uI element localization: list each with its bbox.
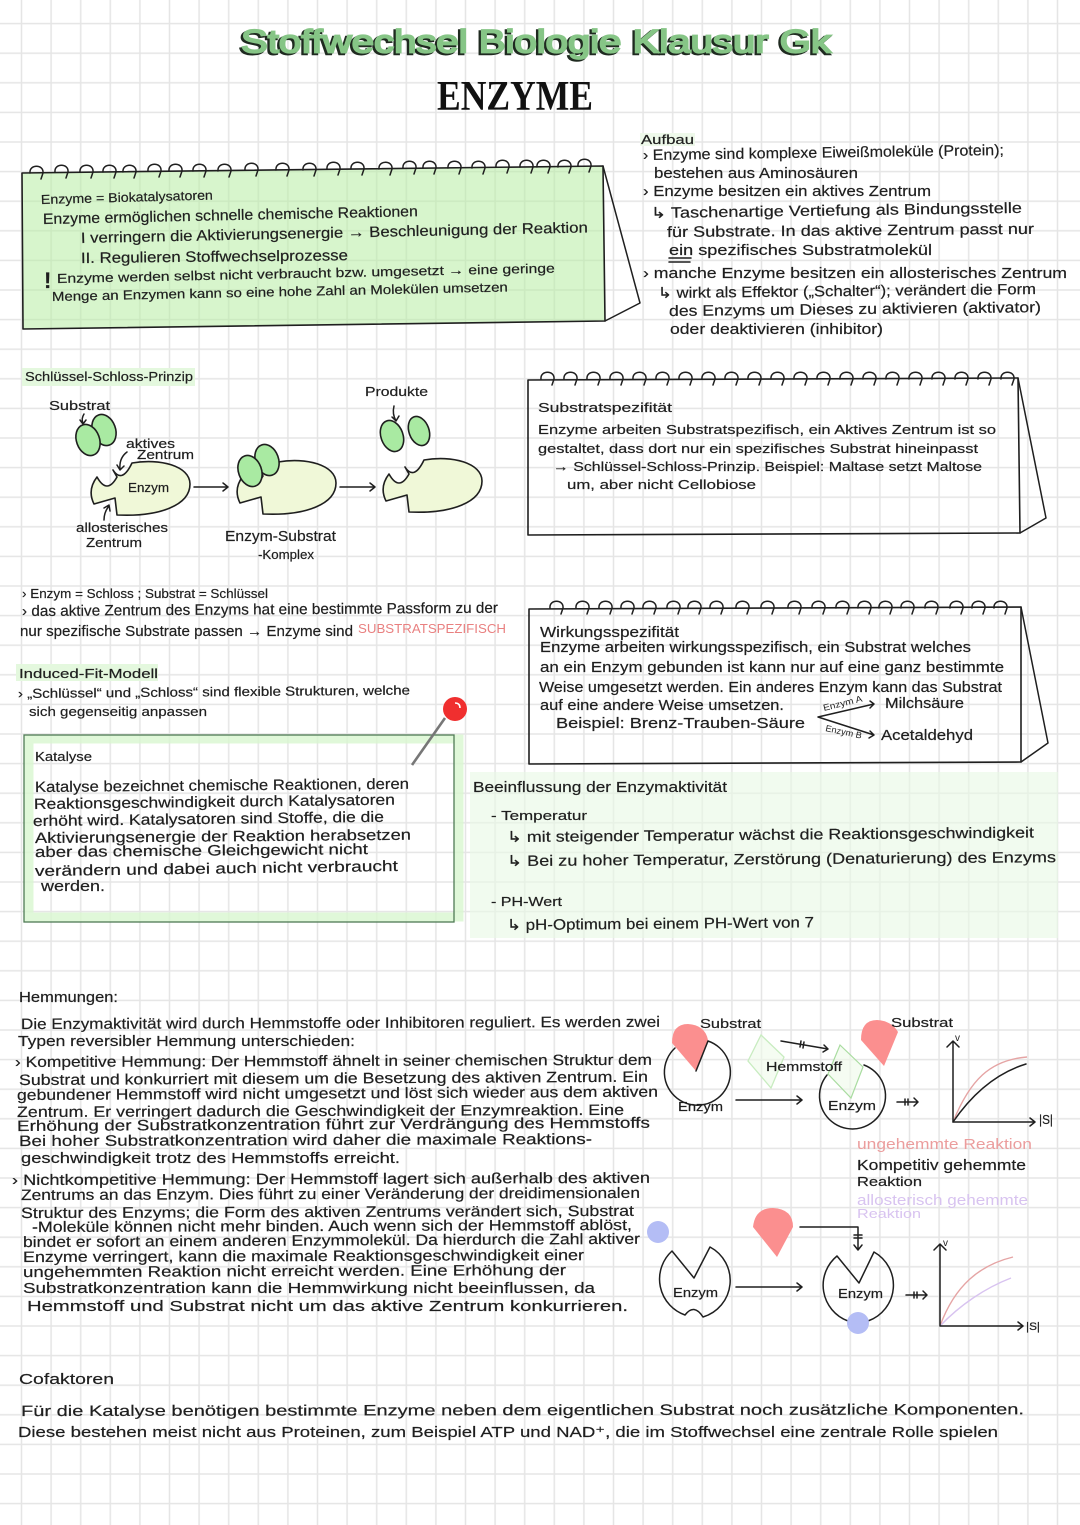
Temperatur text: ↳ mit steigender Temperatur wächst die Reaktionsgeschwindigkeit: [507, 824, 1035, 846]
Substratspezifität text: gestaltet, dass dort nur ein spezifisches Substrat hineinpasst: [538, 441, 978, 456]
legend: Reaktion: [857, 1206, 921, 1221]
text block: Nichtkompetitive Hemmung: bindet er sofort an einem anderen Enzymmolekül. Da hierdurch die Zahl aktiver: [23, 1231, 640, 1251]
label: Substrat: Substrat: [49, 398, 110, 413]
Katalyse text: Katalyse bezeichnet chemische Reaktionen, deren: [35, 776, 409, 796]
calendar stand: [1018, 378, 1046, 533]
Temperatur text: ↳ Bei zu hoher Temperatur, Zerstörung (Denaturierung) des Enzyms: [507, 849, 1056, 870]
calendar stand: [603, 166, 640, 321]
enzyme with inhibitor: [823, 1252, 893, 1334]
arrow: Substrat: [80, 414, 86, 424]
Wirkungsspezifität text: Enzyme arbeiten wirkungsspezifisch, ein Substrat welches: [540, 639, 971, 656]
label: Substrat: Substrat: [700, 1016, 761, 1031]
pH text: - PH-Wert: [491, 894, 562, 909]
label: aktives Zentrum: [126, 436, 194, 462]
label: Enzym: Enzym: [128, 480, 169, 495]
blocked arrow: [906, 1291, 927, 1299]
arrow: [736, 1096, 802, 1104]
diagram: competitive inhibition: [664, 1015, 1053, 1129]
heading: Induced-Fit-Modell: [16, 664, 158, 681]
Aufbau text: ein spezifisches Substratmolekül: [669, 242, 932, 259]
Temperatur text: [491, 808, 1056, 870]
enzyme with allosteric site: [660, 1247, 730, 1317]
Aufbau text: ↳ wirkt als Effektor („Schalter“); verändert die Form: [658, 281, 1036, 302]
text block: Nichtkompetitive Hemmung: Zentrums an das Enzym. Dies führt zu einer Veränderung der dreidimensionalen: [21, 1185, 640, 1204]
text block: Hemmungen intro: Die Enzymaktivität wird durch Hemmstoffe oder Inhibitoren reguliert. Es werden zwei: [21, 1014, 660, 1033]
Katalyse heading: Katalyse: [35, 749, 92, 764]
label: Acetaldehyd: Acetaldehyd: [881, 727, 973, 744]
text block: Nichtkompetitive Hemmung: Substratkonzentration kann die Hemmwirkung nicht beeinflussen, da: [23, 1280, 596, 1297]
graph: competitive inhibition: [947, 1033, 1053, 1127]
label: Enzym-Substrat-Komplex: [225, 528, 337, 562]
Aufbau text: für Substrate. In das aktive Zentrum passt nur: [667, 221, 1034, 241]
enzyme-substrate complex: [234, 441, 336, 514]
Katalyse text: werden.: [40, 878, 105, 895]
panel: Substratspezifität: [528, 372, 1046, 535]
inhibitor circle: [647, 1221, 669, 1243]
title: Stoffwechsel Biologie Klausur Gk: [239, 25, 830, 61]
text block: Kompetitive Hemmung: Bei hoher Substratkonzentration wird daher die maximale Reaktions-: [19, 1131, 592, 1150]
legend: ungehemmte Reaktion: [857, 1136, 1032, 1153]
substrate: [753, 1208, 793, 1257]
calendar sheet: [528, 378, 1020, 535]
heading: ENZYME: ENZYME: [437, 74, 593, 120]
label: allosterisches Zentrum: Zentrum: [86, 535, 142, 550]
label: allosterisches Zentrum: [76, 520, 169, 550]
diagram: Schlüssel-Schloss-Prinzip: [22, 368, 482, 562]
Wirkungsspezifität text: Beispiel: Brenz-Trauben-Säure: [556, 715, 805, 732]
panel: Beeinflussung der Enzymaktivität: [470, 772, 1058, 938]
arrow: [736, 1283, 802, 1291]
panel background: [470, 772, 1058, 938]
text block: Kompetitive Hemmung: Substrat und konkurriert mit diesem um die Besetzung des aktiven Zentrum. Ein: [19, 1069, 648, 1089]
Wirkungsspezifität text: [539, 624, 1004, 732]
heading highlight: [640, 133, 695, 146]
Katalyse text: [33, 776, 411, 895]
label: Enzym: Enzym: [838, 1286, 883, 1301]
text block: Nichtkompetitive Hemmung: › Nichtkompetitive Hemmung: Der Hemmstoff lagert sich außerhalb des aktiven: [12, 1170, 650, 1189]
text block: Cofaktoren: [18, 1401, 1024, 1441]
text block: Induced-Fit: sich gegenseitig anpassen: [29, 704, 207, 719]
text block: Kompetitive Hemmung: Zentrum. Er verringert dadurch die Geschwindigkeit der Enzymreaktion. Eine: [17, 1102, 624, 1121]
definition text: II. Regulieren Stoffwechselprozesse: [81, 247, 348, 267]
text block: Induced-Fit: › „Schlüssel“ und „Schloss“ sind flexible Strukturen, welche: [18, 683, 410, 701]
text block: Schlüssel-Schloss explanation: [20, 586, 506, 640]
text block: Schlüssel-Schloss explanation: SUBSTRATSPEZIFISCH: [358, 621, 506, 636]
Aufbau text: › Enzyme besitzen ein aktives Zentrum: [643, 183, 931, 200]
Substratspezifität text: um, aber nicht Cellobiose: [567, 477, 756, 492]
icon: substrate: [72, 411, 120, 459]
Aufbau text: bestehen aus Aminosäuren: [654, 165, 858, 182]
Aufbau text: ↳ Taschenartige Vertiefung als Bindungsstelle: [651, 200, 1022, 222]
label: Enzym A: Enzym A: [822, 694, 863, 713]
label: Milchsäure: Milchsäure: [885, 695, 964, 712]
text block: Schlüssel-Schloss explanation: › das aktive Zentrum des Enzyms hat eine bestimmte Passform zu der: [22, 600, 498, 620]
Wirkungsspezifität text: an ein Enzym gebunden ist kann nur auf eine ganz bestimmte: [540, 659, 1004, 676]
label: allosterisches Zentrum: allosterisches: [76, 520, 169, 535]
graph: competitive inhibition: v: [955, 1033, 960, 1044]
blocked arrow: [800, 1227, 862, 1250]
graph: allosteric inhibition: |S|: [1026, 1321, 1040, 1333]
Katalyse text: erhöht wird. Katalysatoren sind Stoffe, die die: [33, 809, 384, 830]
text block: Schlüssel-Schloss explanation: › Enzym = Schloss ; Substrat = Schlüssel: [22, 586, 268, 601]
title: Stoffwechsel Biologie Klausur Gk: [241, 24, 832, 60]
Aufbau text: [643, 142, 1067, 338]
pH text: [491, 894, 814, 934]
calendar sheet: [22, 166, 605, 329]
Aufbau text: › Enzyme sind komplexe Eiweißmoleküle (Protein);: [643, 142, 1004, 164]
calendar sheet: [529, 607, 1021, 764]
text block: Nichtkompetitive Hemmung: Struktur des Enzyms; die Form des aktiven Zentrums verändert sich, Substrat: [21, 1203, 635, 1222]
border: [24, 735, 454, 922]
label: aktives Zentrum: aktives: [126, 436, 176, 451]
heading: Schlüssel-Schloss-Prinzip: Schlüssel-Schloss-Prinzip: [25, 369, 193, 384]
text block: Nichtkompetitive Hemmung: -Moleküle können nicht mehr binden. Auch wenn sich der Hemmstoff ablöst,: [32, 1217, 632, 1236]
label: Enzym: Enzym: [673, 1285, 718, 1300]
text block: Kompetitive Hemmung: › Kompetitive Hemmung: Der Hemmstoff ähnelt in seiner chemischen Struktur dem: [15, 1052, 652, 1071]
label: Enzym-Substrat-Komplex: -Komplex: [258, 547, 314, 562]
Aufbau text: des Enzyms um Dieses zu aktivieren (aktivator): [669, 299, 1041, 320]
legend: Kompetitiv gehemmte: [857, 1157, 1026, 1174]
heading highlight: [22, 368, 195, 386]
text block: Hemmungen intro: [18, 1014, 660, 1050]
arrow: Produkte: [392, 406, 399, 421]
calendar rings: [550, 601, 1007, 614]
text block: Kompetitive Hemmung: [15, 1052, 658, 1167]
pH text: ↳ pH-Optimum bei einem PH-Wert von 7: [507, 914, 814, 934]
label: Enzym B: Enzym B: [825, 723, 863, 741]
legend: [857, 1136, 1032, 1221]
label: Produkte: Produkte: [365, 384, 428, 399]
Aufbau text: › manche Enzyme besitzen ein allosterisches Zentrum: [643, 265, 1067, 282]
text block: Kompetitive Hemmung: geschwindigkeit trotz des Hemmstoffs erreicht.: [21, 1150, 400, 1167]
text block: Cofaktoren: Für die Katalyse benötigen bestimmte Enzyme neben dem eigentlichen Substrat noch zusätzliche Komponenten.: [21, 1401, 1024, 1420]
Temperatur text: - Temperatur: [491, 808, 588, 823]
text block: Schlüssel-Schloss explanation: nur spezifische Substrate passen → Enzyme sind: [20, 623, 353, 640]
graph: competitive inhibition: |S|: [1039, 1112, 1053, 1127]
inhibitor diamond: [748, 1035, 784, 1088]
Katalyse text: aber das chemische Gleichgewicht nicht: [35, 841, 369, 861]
label: aktives Zentrum: Zentrum: [137, 447, 194, 462]
text block: Nichtkompetitive Hemmung: Enzyme verringert, kann die maximale Reaktionsgeschwindigkeit einer: [23, 1247, 584, 1266]
icon: products: [376, 413, 434, 455]
heading: Hemmungen: Hemmungen:: [19, 989, 118, 1006]
arrow: aktives Zentrum: [117, 452, 127, 470]
blocked arrow: [781, 1041, 828, 1052]
calendar stand: [1021, 607, 1048, 762]
definition text: I verringern die Aktivierungsenergie → Beschleunigung der Reaktion: [81, 219, 588, 247]
Substratspezifität text: → Schlüssel-Schloss-Prinzip. Beispiel: Maltase setzt Maltose: [553, 459, 982, 474]
definition text: [41, 188, 588, 304]
heading: Cofaktoren: Cofaktoren: [19, 1371, 114, 1388]
enzyme with substrate: [664, 1024, 730, 1105]
diagram: non-competitive inhibition: [647, 1208, 1040, 1334]
label: Enzym: Enzym: [828, 1098, 876, 1113]
pin: [412, 697, 467, 765]
text block: Hemmungen intro: Typen reversibler Hemmung unterschieden:: [18, 1033, 355, 1050]
definition text: Enzyme = Biokatalysatoren: [41, 188, 213, 207]
Wirkungsspezifität text: Weise umgesetzt werden. Ein anderes Enzym kann das Substrat: [539, 679, 1003, 696]
definition text: Enzyme ermöglichen schnelle chemische Reaktionen: [43, 203, 418, 228]
graph: allosteric inhibition: v: [943, 1238, 948, 1249]
calendar rings: [541, 372, 1014, 385]
panel: enzyme definition calendar: [22, 159, 640, 329]
Wirkungsspezifität text: Wirkungsspezifität: [540, 624, 680, 641]
arrow: allosterisches Zentrum: [104, 505, 110, 520]
definition text: Enzyme werden selbst nicht verbraucht bzw. umgesetzt → eine geringe: [57, 261, 555, 286]
arrow: [194, 483, 228, 491]
enzyme 1: [91, 462, 190, 515]
Aufbau text: oder deaktivieren (inhibitor): [670, 321, 883, 338]
definition text: !: [44, 268, 51, 293]
label: Hemmstoff: Hemmstoff: [766, 1059, 842, 1074]
Katalyse text: Aktivierungsenergie der Reaktion herabsetzen: [35, 827, 411, 847]
enzyme with inhibitor: [820, 1045, 886, 1129]
heading: Induced-Fit-Modell: Induced-Fit-Modell: [19, 666, 158, 681]
blocked arrow: [897, 1098, 918, 1106]
text block: Induced-Fit: [18, 683, 410, 719]
legend: allosterisch gehemmte: [857, 1192, 1028, 1209]
arrow: [340, 483, 375, 491]
text block: Kompetitive Hemmung: Erhöhung der Substratkonzentration führt zur Verdrängung des Hemmstoffs: [17, 1115, 650, 1135]
Substratspezifität text: [538, 400, 996, 492]
label: Enzym-Substrat-Komplex: Enzym-Substrat: [225, 528, 337, 545]
graph: allosteric inhibition: [934, 1238, 1040, 1333]
text block: Nichtkompetitive Hemmung: Hemmstoff und Substrat nicht um das aktive Zentrum konkurrieren.: [27, 1298, 628, 1315]
Substratspezifität text: Enzyme arbeiten Substratspezifisch, ein Aktives Zentrum ist so: [538, 422, 996, 437]
heading: Beeinflussung der Enzymaktivität: [473, 779, 728, 796]
text block: Kompetitive Hemmung: gebundener Hemmstoff wird nicht umgesetzt und löst sich wieder aus dem aktiven: [17, 1084, 658, 1104]
panel: Wirkungsspezifität: [529, 601, 1048, 764]
Katalyse text: Reaktionsgeschwindigkeit durch Katalysatoren: [34, 792, 395, 813]
substrate: [861, 1020, 898, 1066]
text block: Nichtkompetitive Hemmung: [12, 1170, 650, 1315]
text block: Cofaktoren: Diese bestehen meist nicht aus Proteinen, zum Beispiel ATP und NAD⁺, die im Stoffwechsel eine zentrale Rolle spielen: [18, 1424, 998, 1441]
label: Enzym: Enzym: [678, 1099, 723, 1114]
green frame: [29, 739, 459, 917]
heading: Aufbau: Aufbau: [641, 132, 694, 147]
Wirkungsspezifität text: auf eine andere Weise umsetzen.: [540, 697, 784, 714]
Katalyse text: verändern und dabei auch nicht verbraucht: [35, 858, 399, 880]
Substratspezifität text: Substratspezifität: [538, 400, 673, 415]
panel: Katalyse: [24, 697, 467, 922]
legend: Reaktion: [857, 1174, 922, 1189]
panel: Aufbau: [640, 132, 1067, 338]
enzyme 3: [383, 459, 482, 512]
text block: Nichtkompetitive Hemmung: ungehemmten Reaktion nicht erreicht werden. Eine Erhöhung der: [23, 1262, 566, 1281]
label: Substrat: Substrat: [891, 1015, 953, 1030]
branching reaction arrows: [818, 701, 874, 738]
calendar rings: [30, 159, 591, 179]
definition text: Menge an Enzymen kann so eine hohe Zahl an Molekülen umsetzen: [52, 279, 508, 304]
